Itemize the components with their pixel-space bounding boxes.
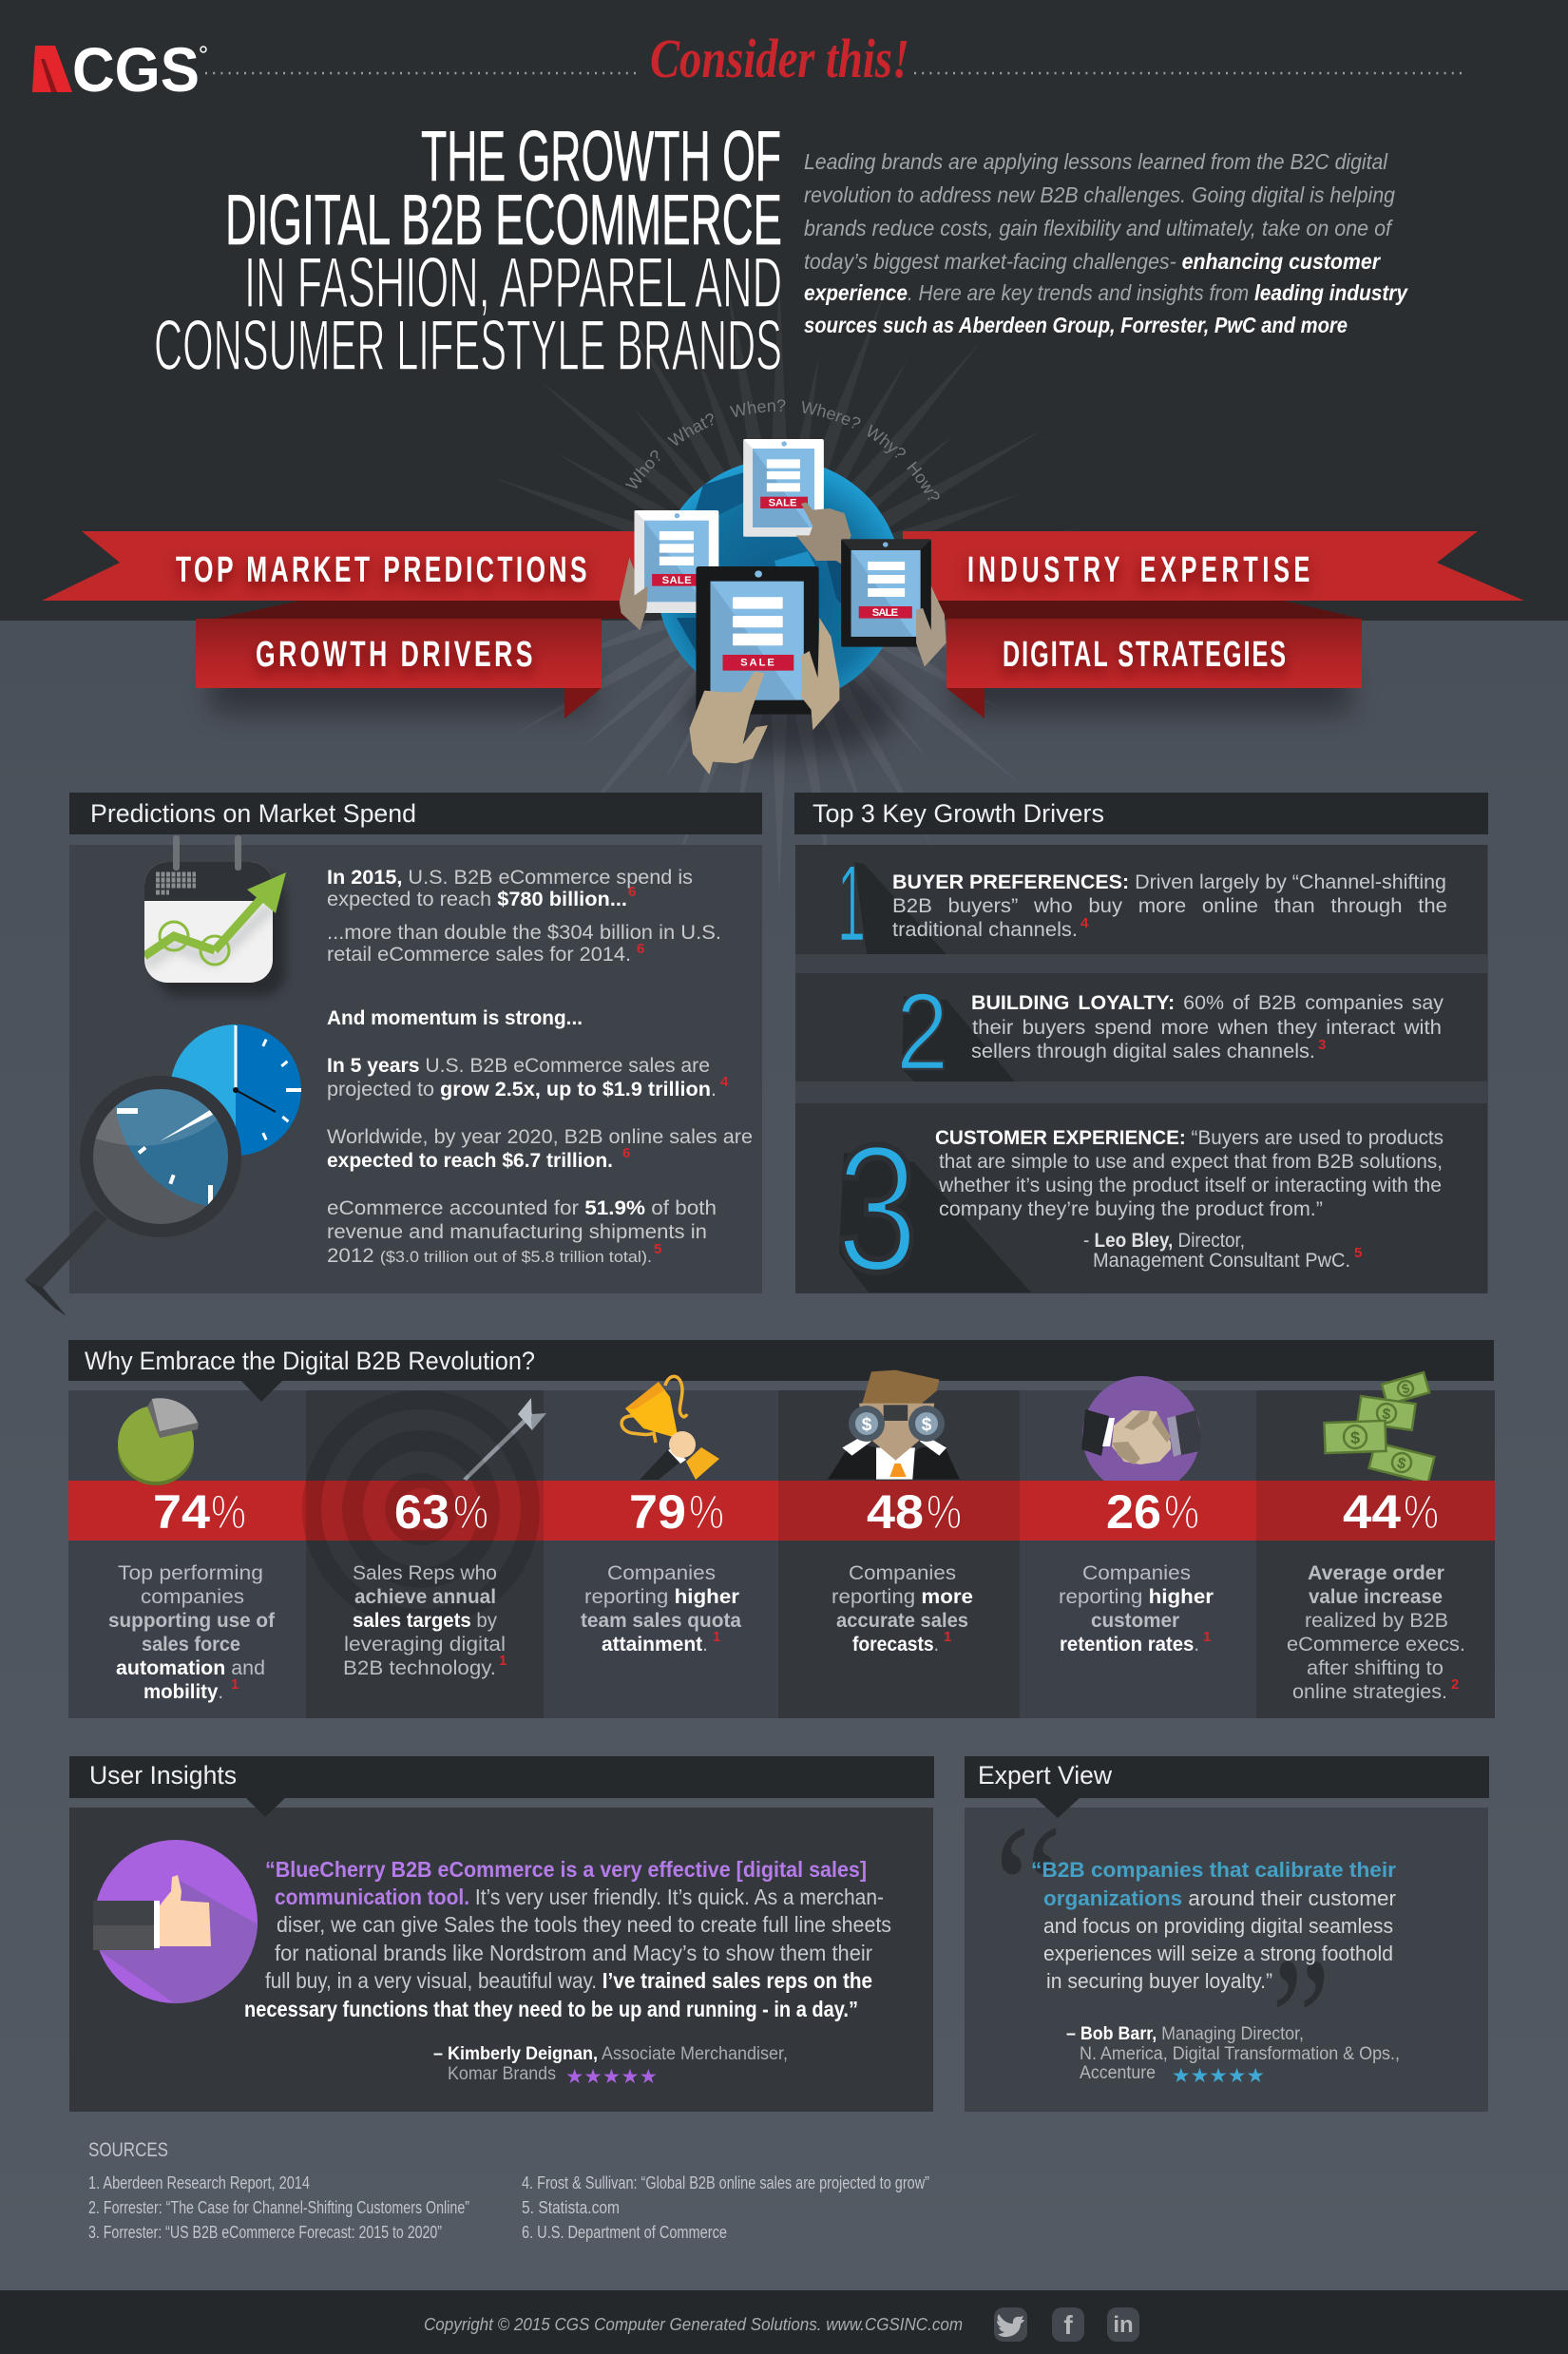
text: momentum [327, 1007, 753, 1267]
page background [0, 621, 1568, 2290]
curved question words: When? [730, 399, 785, 417]
stat: 44%: value increase [1309, 1586, 1443, 1608]
quote: user insights [244, 1857, 891, 2021]
heading pointer [1036, 1798, 1080, 1818]
heading bar [794, 793, 1488, 834]
driver 1: 1 [837, 843, 866, 965]
intro paragraph: sources such as Aberdeen Group, Forrester, PwC and more [804, 313, 1348, 337]
quote: expert view: “B2B companies that calibrate their [1031, 1858, 1396, 1882]
stat: 74%: 74 [153, 1485, 210, 1539]
quote: user insights: communication tool. It’s very user friendly. It’s quick. As a merchan- [275, 1885, 884, 1909]
heading: Expert View [978, 1761, 1112, 1789]
stat: 63%: % [453, 1485, 488, 1539]
sources: 4. Frost & Sullivan: “Global B2B online sales are projected to grow” [522, 2173, 929, 2192]
curved question words: What? [667, 413, 713, 446]
text: momentum: expected to reach $6.7 trillion. [327, 1150, 613, 1172]
attribution: Kimberly Deignan: Komar Brands [448, 2064, 556, 2084]
ribbon: industry expertise: INDUSTRY EXPERTISE [967, 550, 1314, 590]
attribution: Kimberly Deignan [433, 2044, 788, 2088]
text: market spend: expected to reach $780 billion... [327, 889, 627, 910]
icon: trophy [621, 1376, 719, 1480]
sources: 3. Forrester: “US B2B eCommerce Forecast: 2015 to 2020” [88, 2223, 442, 2242]
driver 3: that are simple to use and expect that from B2B solutions, [939, 1151, 1443, 1173]
driver 3: 5 [1354, 1245, 1362, 1261]
copyright: Copyright © 2015 CGS Computer Generated Solutions. www.CGSINC.com [424, 2315, 963, 2334]
stat: 44%: after shifting to [1307, 1657, 1444, 1679]
quote: expert view: and focus on providing digital seamless [1043, 1914, 1393, 1938]
title: IN FASHION, APPAREL AND [244, 242, 782, 322]
globe [657, 459, 902, 704]
heading: Predictions on Market Spend [90, 799, 416, 828]
text: market spend: 6 [637, 941, 644, 957]
stat: 63% [343, 1485, 507, 1679]
dotted rule right [914, 72, 1465, 74]
tablet: top white [743, 439, 824, 537]
stat: 26%: reporting higher [1059, 1586, 1214, 1608]
stat: 63%: Sales Reps who [353, 1562, 497, 1584]
driver 3: Management Consultant PwC. [1093, 1250, 1350, 1272]
quote: user insights: diser, we can give Sales the tools they need to create full line sheets [277, 1912, 891, 1937]
heading pointer [241, 1381, 282, 1402]
quote: user insights: necessary functions that they need to be up and running - in a day.” [244, 1997, 858, 2021]
ribbon: digital strategies: DIGITAL STRATEGIES [1003, 635, 1288, 675]
quote: user insights: “BlueCherry B2B eCommerce is a very effective [digital sales] [265, 1857, 867, 1882]
attribution: Bob Barr: ★★★★★ [1172, 2064, 1265, 2087]
hand: right tablet [916, 586, 947, 667]
quote: expert view: in securing buyer loyalty.” [1046, 1969, 1272, 1993]
driver 3: CUSTOMER EXPERIENCE: “Buyers are used to products [935, 1127, 1444, 1149]
intro paragraph [804, 149, 1408, 337]
driver 2: BUILDING LOYALTY: 60% of B2B companies say [971, 992, 1444, 1014]
curved question words [625, 399, 939, 500]
icon: money bills: $ [1381, 1406, 1391, 1424]
stat: 26%: % [1164, 1485, 1199, 1539]
curved question words: Why? [868, 424, 906, 458]
attribution: Bob Barr: N. America, Digital Transformation & Ops., [1080, 2044, 1400, 2064]
stat: 63%: leveraging digital [344, 1634, 506, 1655]
stat: 63%: 63 [394, 1485, 449, 1539]
sources: 5. Statista.com [522, 2198, 620, 2217]
driver 2 [795, 971, 1487, 1093]
stat: 79%: 1 [713, 1629, 720, 1645]
driver 2: 2 [896, 971, 948, 1093]
heading bar [68, 1340, 1494, 1381]
icon: money bills: $ [1400, 1380, 1411, 1397]
sunburst rays [477, 278, 1081, 895]
icon: handshake [1081, 1376, 1201, 1494]
intro paragraph: Leading brands are applying lessons learned from the B2C digital [804, 149, 1388, 174]
tablet: top white: SALE [769, 498, 796, 508]
text: market spend: 6 [628, 884, 636, 900]
curved question words: Where? [802, 401, 861, 429]
text: market spend [327, 867, 721, 966]
stat: 26% [1059, 1485, 1214, 1655]
stat: 63%: B2B technology. [343, 1657, 496, 1679]
intro paragraph: today’s biggest market-facing challenges- enhancing customer [804, 249, 1381, 274]
text: momentum: revenue and manufacturing shipments in [327, 1221, 707, 1243]
driver 3: company they’re buying the product from.” [939, 1198, 1323, 1220]
stat: 74%: supporting use of [108, 1610, 276, 1632]
ribbon: growth drivers: GROWTH DRIVERS [256, 635, 536, 675]
stat: 48%: 1 [944, 1629, 951, 1645]
driver 3: 3 [836, 1108, 918, 1310]
stat: 74%: mobility. [143, 1681, 223, 1703]
text: momentum: Worldwide, by year 2020, B2B online sales are [327, 1126, 753, 1148]
panel: user insights [69, 1756, 934, 2112]
stat: 26%: customer [1091, 1610, 1179, 1632]
icon: binocular lenses [849, 1406, 945, 1442]
stat: 74%: % [211, 1485, 246, 1539]
panel body [965, 1808, 1488, 2112]
stat: 48%: forecasts. [852, 1634, 939, 1655]
tablet: left white [635, 510, 718, 613]
text: momentum: 4 [720, 1074, 729, 1090]
stat: 26%: 26 [1106, 1485, 1161, 1539]
hand: top tablet [796, 502, 851, 564]
icon: facebook [1052, 2307, 1084, 2342]
tablet: main black [696, 566, 819, 715]
ribbon: digital strategies [947, 619, 1362, 688]
icon: money bills [1324, 1372, 1434, 1483]
stat: 44%: Average order [1308, 1562, 1444, 1584]
icon: binocular lenses: $ [922, 1415, 932, 1435]
icon: calendar with growth arrow [144, 835, 286, 996]
stat: 63%: 1 [499, 1653, 507, 1669]
heading: Why Embrace the Digital B2B Revolution? [85, 1347, 535, 1375]
icon: target [312, 1400, 530, 1618]
heading: User Insights [89, 1761, 237, 1789]
stat: 44%: online strategies. [1292, 1681, 1447, 1703]
icon: clock with magnifier [25, 1024, 301, 1316]
driver 1: 4 [1080, 915, 1089, 931]
tablet: right black: SALE [872, 607, 898, 619]
stat: 74%: companies [141, 1586, 244, 1608]
panel body [795, 845, 1488, 1293]
icon: pie chart [118, 1398, 199, 1485]
tablet: left white: SALE [662, 575, 692, 586]
stat: 44%: % [1404, 1485, 1439, 1539]
tablet: right black [841, 539, 931, 647]
attribution: Bob Barr [1066, 2024, 1400, 2087]
header background [0, 0, 1568, 621]
driver 1: BUYER PREFERENCES: Driven largely by “Channel-shifting [892, 871, 1446, 893]
stat: 44%: 2 [1451, 1676, 1459, 1693]
icon: binocular lenses: $ [862, 1415, 872, 1435]
icon: thumbs up [93, 1840, 258, 2003]
driver 2: their buyers spend more when they interact with [972, 1017, 1442, 1039]
title [154, 116, 782, 385]
curved question words: Who? [625, 450, 660, 488]
hand: main right [801, 618, 839, 730]
text: market spend: In 2015, U.S. B2B eCommerce spend is [327, 867, 693, 889]
panel: why embrace the digital B2B revolution [68, 1340, 1495, 1718]
title: THE GROWTH OF [421, 116, 781, 196]
stat: 48% [832, 1485, 973, 1655]
stat: 44% [1287, 1485, 1465, 1703]
dotted rule left [205, 72, 639, 74]
sources [88, 2139, 929, 2242]
heading: Top 3 Key Growth Drivers [813, 799, 1104, 828]
intro paragraph: revolution to address new B2B challenges. Going digital is helping [804, 182, 1395, 207]
ribbon: top market predictions: TOP MARKET PREDICTIONS [176, 550, 590, 590]
text: momentum: 5 [654, 1241, 661, 1257]
driver 3: - Leo Bley, Director, [1083, 1230, 1245, 1252]
script heading: Consider this: Consider this! [650, 28, 909, 89]
stat: 74%: automation and [116, 1657, 265, 1679]
stat: 74%: sales force [142, 1634, 240, 1655]
icon: linkedin [1107, 2307, 1139, 2342]
stat: 48%: % [927, 1485, 962, 1539]
panel: expert view [965, 1756, 1489, 2121]
heading bar [69, 1756, 934, 1798]
driver 2: 3 [1318, 1037, 1326, 1053]
stat: 26%: 1 [1203, 1629, 1211, 1645]
stat: 63%: sales targets by [353, 1610, 497, 1632]
closing quote mark: ” [1272, 1922, 1330, 2121]
icon: twitter [994, 2307, 1027, 2342]
stat: 79%: 79 [629, 1485, 686, 1539]
stat: 26%: retention rates. [1060, 1634, 1199, 1655]
driver 3: whether it’s using the product itself or interacting with the [938, 1175, 1442, 1196]
ribbon: growth drivers [196, 619, 602, 688]
ribbon: industry expertise [903, 531, 1524, 601]
stat: 79%: Companies [607, 1562, 716, 1584]
quote: user insights: for national brands like Nordstrom and Macy’s to show them their [275, 1941, 872, 1965]
icon: facebook: f [1063, 2310, 1073, 2340]
attribution: Bob Barr: – Bob Barr, Managing Director, [1066, 2024, 1304, 2044]
stat columns [68, 1390, 1495, 1718]
heading pointer [246, 1798, 285, 1817]
text: momentum: 2012 ($3.0 trillion out of $5.8 trillion total). [327, 1245, 652, 1267]
text: market spend: ...more than double the $304 billion in U.S. [327, 922, 721, 944]
intro paragraph: experience. Here are key trends and insights from leading industry [804, 280, 1408, 305]
sources: 6. U.S. Department of Commerce [522, 2223, 727, 2242]
sources: SOURCES [88, 2139, 168, 2161]
stat: 44%: eCommerce execs. [1287, 1634, 1465, 1655]
heading bar [965, 1756, 1489, 1798]
title: DIGITAL B2B ECOMMERCE [225, 180, 782, 259]
panel body [69, 1808, 933, 2112]
icon: arrow [463, 1398, 546, 1481]
stat: 74%: 1 [231, 1676, 239, 1693]
text: momentum: eCommerce accounted for 51.9% of both [327, 1197, 717, 1219]
panel: top 3 key growth drivers [794, 793, 1488, 1310]
text: market spend: retail eCommerce sales for 2014. [327, 944, 631, 966]
opening quote mark: “ [994, 1789, 1062, 1988]
icon: businessman with binoculars [828, 1370, 960, 1480]
icon: money bills: $ [1350, 1428, 1360, 1447]
stat: 63%: achieve annual [354, 1586, 496, 1608]
stat: 74% [108, 1485, 276, 1703]
ribbon folds [215, 601, 1362, 718]
ribbon shadows [211, 660, 1350, 756]
stat: 44%: realized by B2B [1305, 1610, 1448, 1632]
quote: expert view [1031, 1858, 1396, 1993]
panel: predictions on market spend [25, 793, 762, 1316]
attribution: Kimberly Deignan: ★★★★★ [565, 2065, 658, 2088]
stat: 79%: % [689, 1485, 724, 1539]
stat: 79%: attainment. [602, 1634, 708, 1655]
text: momentum: And momentum is strong... [327, 1007, 583, 1029]
hand: main left [689, 672, 768, 775]
sources: 1. Aberdeen Research Report, 2014 [88, 2173, 310, 2192]
red stat band [68, 1481, 1495, 1541]
driver 1: traditional channels. [892, 919, 1078, 941]
tablet: main black: SALE [740, 658, 774, 669]
curved question words: How? [907, 462, 939, 500]
stat: 48%: accurate sales [836, 1610, 968, 1632]
text: momentum: projected to grow 2.5x, up to $1.9 trillion . [327, 1079, 717, 1100]
stat: 48%: reporting more [832, 1586, 973, 1608]
hand: left tablet [620, 558, 648, 630]
title: CONSUMER LIFESTYLE BRANDS [154, 305, 782, 385]
quote: expert view: experiences will seize a strong foothold [1043, 1942, 1393, 1965]
driver 3 [795, 1103, 1487, 1310]
icon: money bills: $ [1395, 1455, 1407, 1473]
stat: 44%: 44 [1343, 1485, 1401, 1539]
logo: CGS: CGS [72, 34, 200, 105]
stat: 74%: Top performing [118, 1562, 263, 1584]
text: momentum: In 5 years U.S. B2B eCommerce sales are [327, 1055, 710, 1077]
stat: 79%: team sales quota [581, 1610, 741, 1632]
intro paragraph: brands reduce costs, gain flexibility and ultimately, take on one of [804, 216, 1393, 240]
footer [0, 2290, 1568, 2354]
attribution: Bob Barr: Accenture [1080, 2063, 1156, 2083]
quote: expert view: organizations around their customer [1043, 1886, 1396, 1910]
stat: 48%: 48 [867, 1485, 924, 1539]
tablets and hands illustration [620, 439, 947, 775]
driver 1 [795, 843, 1487, 965]
driver 2: sellers through digital sales channels. [971, 1041, 1315, 1062]
driver 1: B2B buyers” who buy more online than through the [892, 895, 1447, 917]
stat: 48%: Companies [849, 1562, 956, 1584]
stat: 79% [581, 1485, 741, 1655]
stat: 79%: reporting higher [584, 1586, 739, 1608]
sources: 2. Forrester: “The Case for Channel-Shifting Customers Online” [88, 2198, 469, 2217]
text: momentum: 6 [622, 1145, 630, 1161]
heading bar [69, 793, 762, 834]
stat: 26%: Companies [1082, 1562, 1191, 1584]
quote: user insights: full buy, in a very visual, beautiful way. I’ve trained sales reps on the [265, 1968, 872, 1993]
icon: linkedin: in [1113, 2312, 1134, 2338]
panel body [69, 845, 762, 1293]
ribbon: top market predictions [42, 531, 646, 601]
attribution: Kimberly Deignan: – Kimberly Deignan, Associate Merchandiser, [433, 2044, 788, 2064]
